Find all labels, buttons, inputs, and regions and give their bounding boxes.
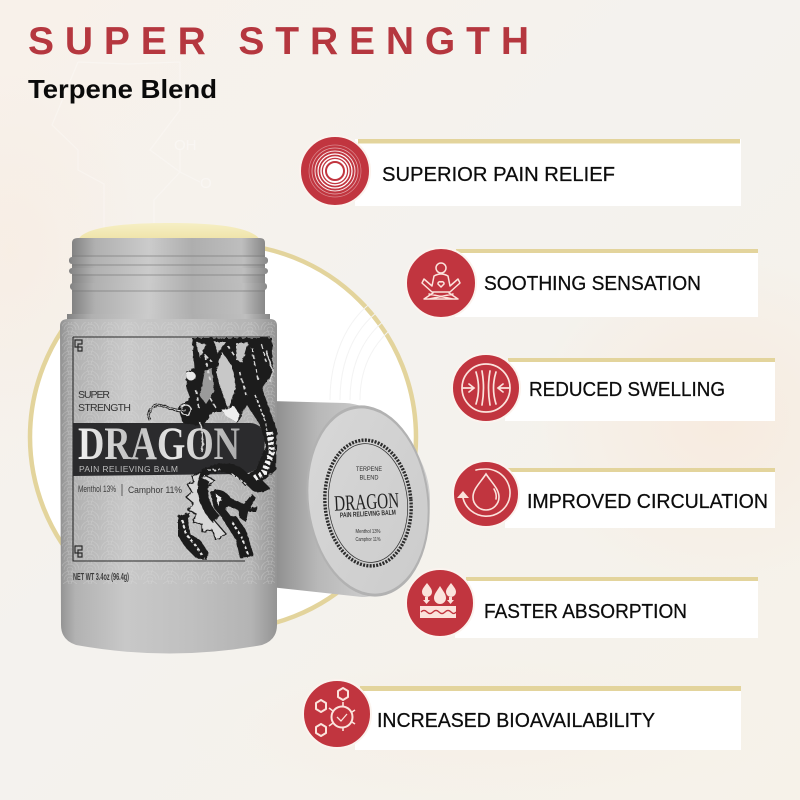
cap label text: DRAGON — [333, 487, 400, 516]
cap label text: Menthol 13% — [356, 529, 381, 535]
label: actives — [78, 484, 182, 496]
dragon tail over the band — [252, 432, 272, 480]
benefit: increased bioavailability — [303, 680, 741, 750]
lower dragon: frilled coil — [186, 472, 226, 540]
icon: droplet with circular arrow — [453, 461, 519, 527]
icon: molecules with checkmark — [303, 680, 371, 748]
title: SUPER STRENGTH — [28, 20, 529, 63]
benefit: faster absorption: FASTER ABSORPTION — [484, 601, 687, 623]
body — [60, 319, 277, 654]
benefit: improved circulation — [453, 461, 775, 528]
background: OH — [174, 137, 196, 154]
whisker — [149, 405, 186, 420]
lower dragon: leg and claws — [228, 494, 258, 522]
cap label text: TERPENE — [356, 466, 383, 473]
icon: droplets on skin — [406, 569, 474, 637]
benefit: faster absorption — [406, 569, 758, 638]
gold circle behind product — [30, 244, 416, 630]
label: actives: Menthol 13% — [78, 484, 116, 495]
benefit: soothing sensation — [406, 248, 758, 318]
upper dragon: light gaps — [216, 352, 236, 408]
icon: concentric rings — [300, 136, 370, 206]
cap label text — [333, 466, 400, 543]
cap label text: Camphor 11% — [356, 537, 381, 543]
label frame — [73, 337, 270, 561]
benefit: increased bioavailability: INCREASED BIOAVAILABILITY — [377, 710, 655, 732]
icon: compressing arrows — [452, 354, 520, 422]
dragon illustration — [149, 338, 277, 560]
icon: meditating figure — [406, 248, 476, 318]
label: net weight: NET WT 3.4oz (96.4g) — [73, 572, 129, 583]
cap label text: BLEND — [360, 474, 379, 482]
label: SUPER STRENGTH: SUPER — [78, 389, 110, 401]
threaded collar — [67, 238, 270, 320]
subtitle: Terpene Blend — [28, 74, 217, 104]
label: actives: Camphor 11% — [128, 485, 182, 496]
label: product name band: PAIN RELIEVING BALM — [79, 464, 178, 474]
benefit: soothing sensation: SOOTHING SENSATION — [484, 273, 701, 295]
cap ring seal — [320, 436, 416, 570]
benefit: reduced swelling: REDUCED SWELLING — [529, 379, 725, 401]
label pattern — [62, 322, 275, 584]
upper dragon: dark mass — [178, 338, 277, 486]
benefit: superior pain relief — [300, 136, 741, 206]
product: balm cap lying on side — [270, 398, 440, 604]
benefit: superior pain relief: SUPERIOR PAIN RELIEF — [382, 164, 615, 186]
lower dragon: tail — [178, 512, 208, 560]
product: balm stick — [60, 223, 277, 654]
background: O — [200, 175, 212, 192]
balm dome — [78, 223, 260, 240]
label: product name band: DRAGON — [78, 418, 240, 470]
label: SUPER STRENGTH — [78, 389, 131, 414]
cap label text: PAIN RELIEVING BALM — [340, 510, 396, 519]
benefit: reduced swelling — [452, 354, 775, 422]
label: SUPER STRENGTH: STRENGTH — [78, 402, 131, 414]
benefit: improved circulation: IMPROVED CIRCULATION — [527, 491, 768, 513]
